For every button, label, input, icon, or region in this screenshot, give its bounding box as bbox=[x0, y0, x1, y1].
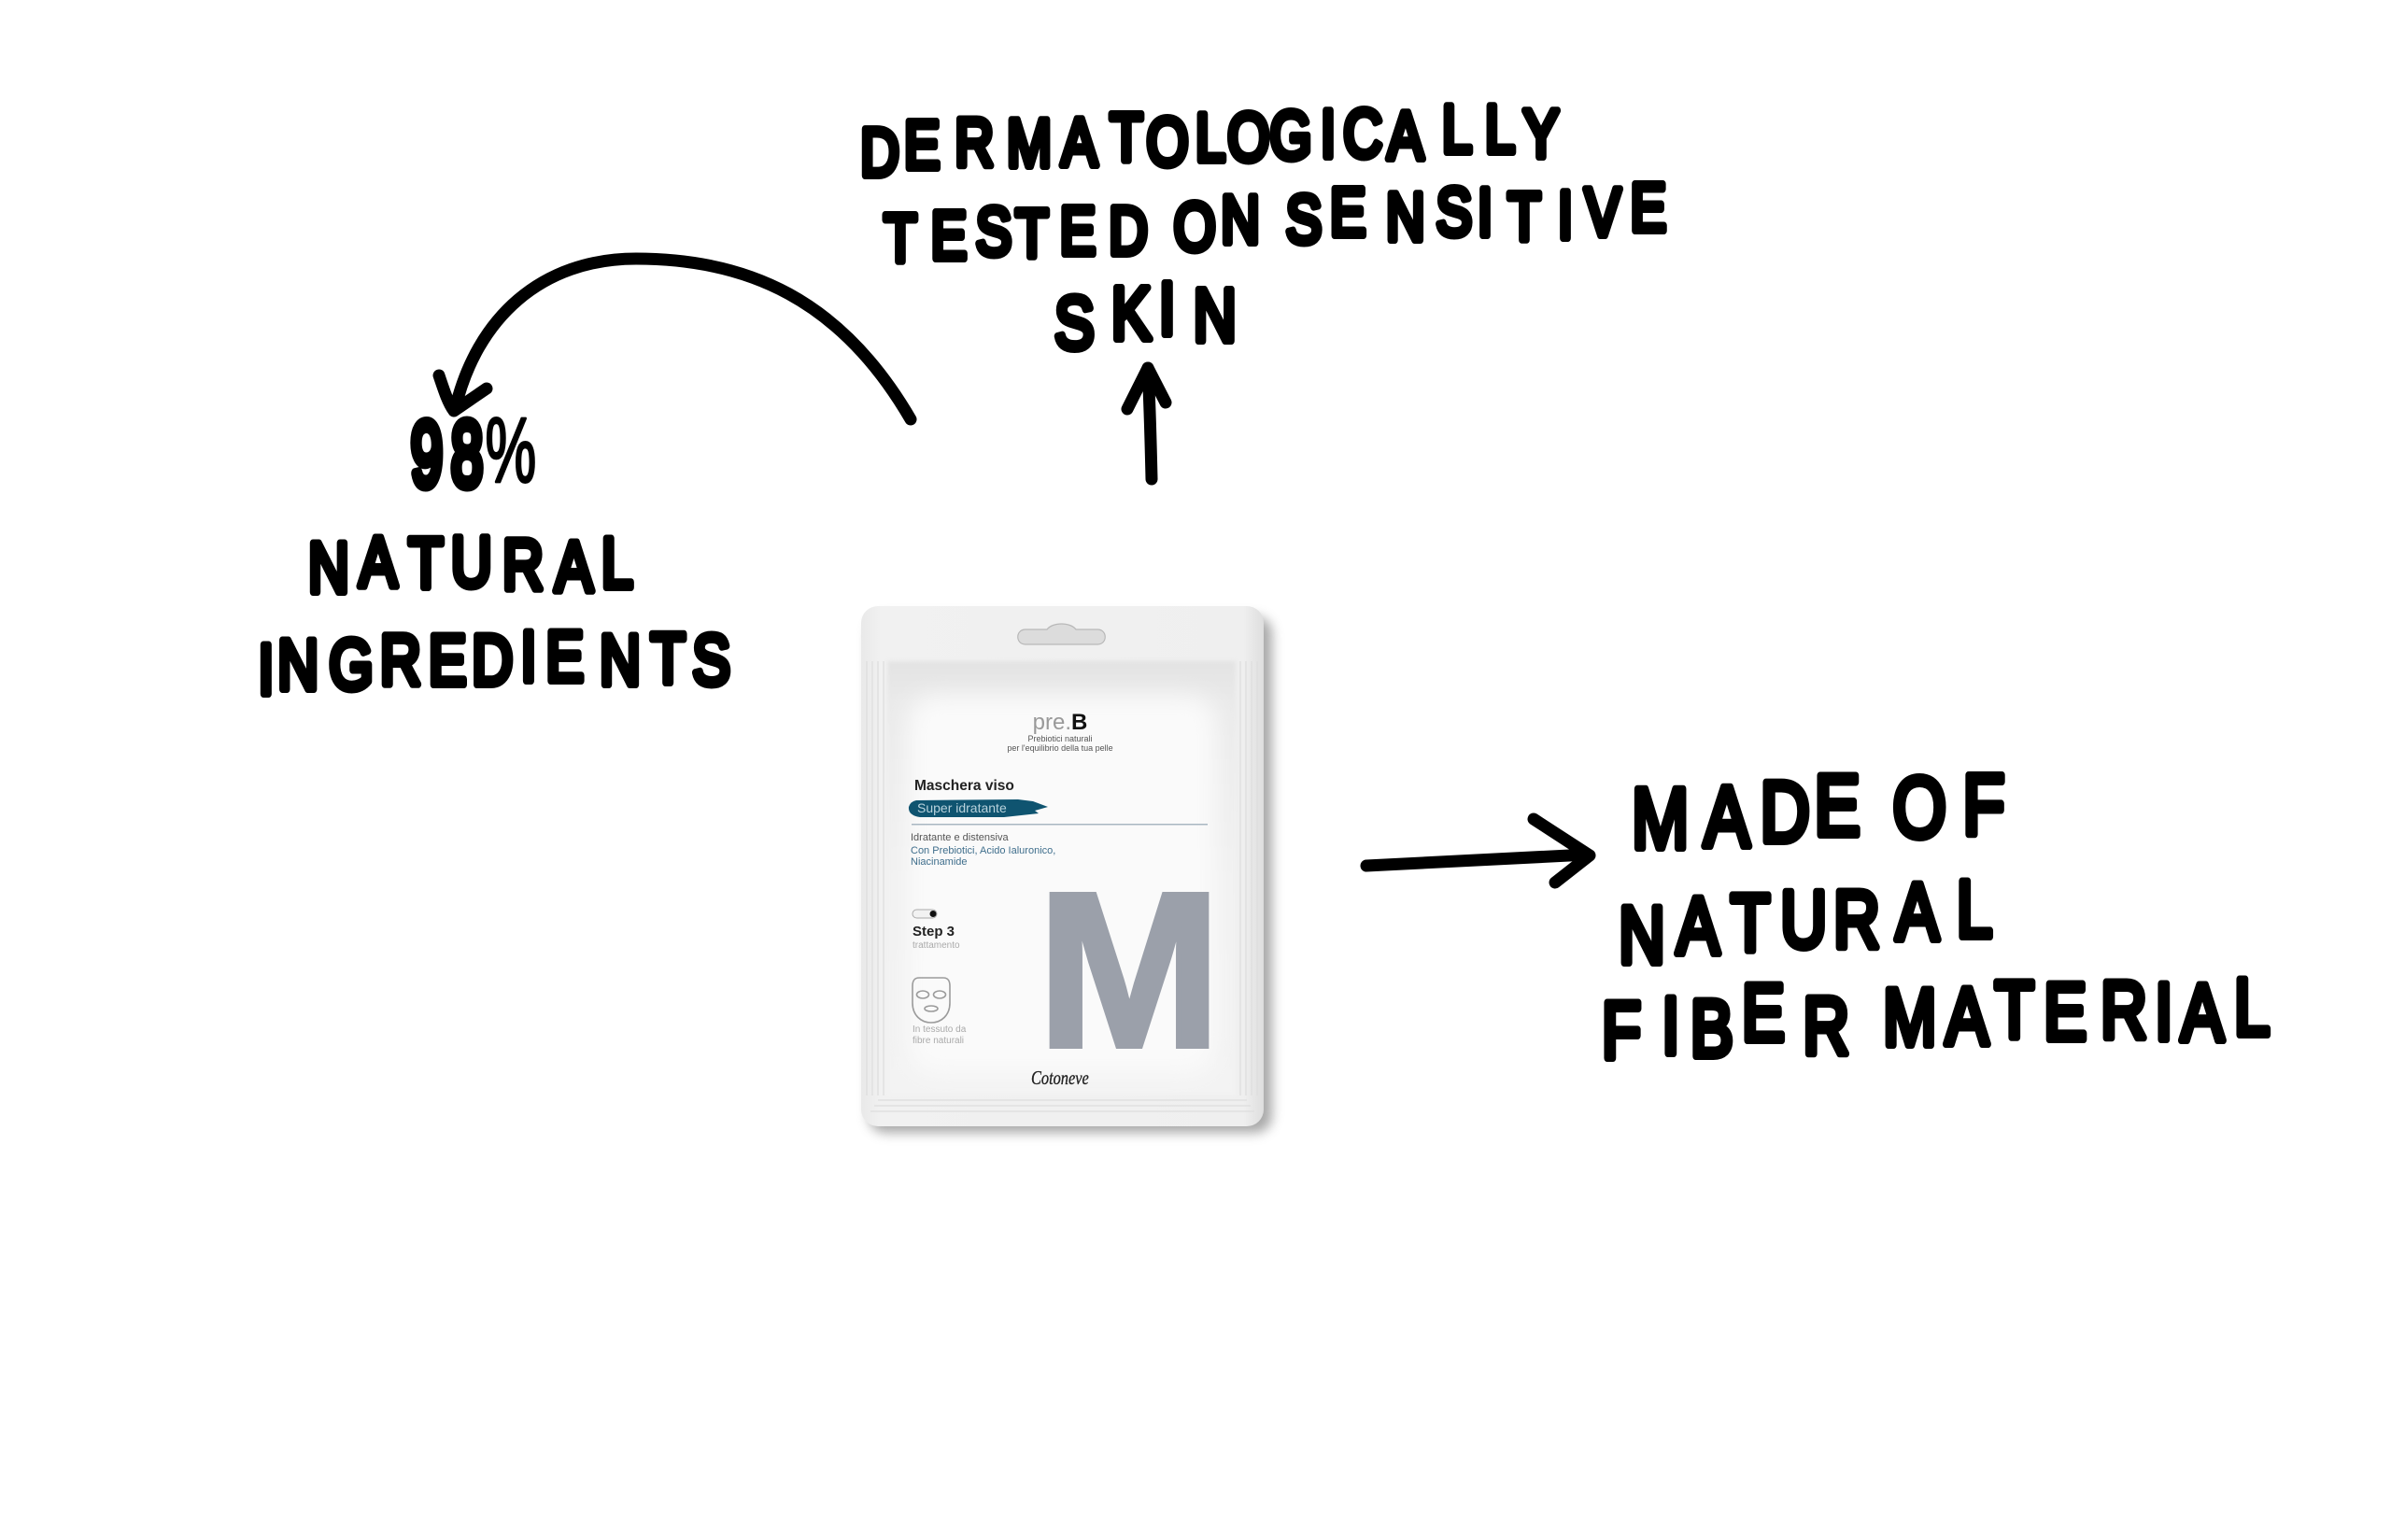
big letter M: M bbox=[1037, 846, 1222, 1095]
text: dermatologically tested on sensitive skin: SKIN bbox=[1054, 267, 1237, 365]
step text bbox=[913, 924, 960, 951]
tagline bbox=[1007, 734, 1113, 753]
step text: Step 3 bbox=[913, 924, 955, 940]
text: made of natural fiber material: NATURAL bbox=[1619, 865, 1992, 981]
mask caption: In tessuto da bbox=[913, 1024, 967, 1035]
mask caption: fibre naturali bbox=[913, 1036, 964, 1046]
description text: Idratante e distensiva bbox=[911, 832, 1009, 843]
text: 98% natural ingredients: NATURAL bbox=[308, 523, 633, 608]
icon: face mask bbox=[913, 978, 950, 1023]
arrow: right to fiber claim bbox=[1366, 819, 1590, 883]
text: 98% natural ingredients: INGREDIENTS bbox=[258, 617, 730, 710]
arrow: curved to 98 percent bbox=[439, 259, 911, 419]
step text: trattamento bbox=[913, 940, 960, 951]
text: 98% natural ingredients: 98% bbox=[411, 400, 536, 506]
logo: Cotoneve: Cotoneve bbox=[1031, 1067, 1089, 1090]
description text: Con Prebiotici, Acido Ialuronico, bbox=[911, 845, 1055, 856]
mask caption bbox=[913, 1024, 967, 1046]
divider bbox=[912, 824, 1208, 826]
text: made of natural fiber material: MADE OF bbox=[1632, 756, 2004, 867]
callout: natural fiber material bbox=[1366, 756, 2270, 1076]
hang hole bbox=[1018, 624, 1105, 644]
brand: pre.B: pre.B bbox=[1033, 710, 1087, 735]
text: 98% natural ingredients bbox=[258, 400, 730, 710]
callout: natural ingredients bbox=[258, 259, 911, 710]
step toggle icon bbox=[913, 910, 937, 918]
label: Super idratante brush stroke bbox=[909, 799, 1048, 817]
text: made of natural fiber material: FIBER MATERIAL bbox=[1602, 963, 2270, 1076]
description text bbox=[911, 832, 1055, 868]
arrow: up to skin claim bbox=[1127, 368, 1166, 479]
text: dermatologically tested on sensitive skin: TESTED ON SENSITIVE bbox=[884, 170, 1666, 276]
text: dermatologically tested on sensitive skin: DERMATOLOGICALLY bbox=[860, 92, 1559, 190]
tagline: per l'equilibrio della tua pelle bbox=[1007, 743, 1113, 753]
description text: Niacinamide bbox=[911, 856, 968, 868]
callout: dermatologically tested bbox=[860, 92, 1666, 479]
pouch inner panel bbox=[867, 661, 1257, 1111]
product: sheet mask pouch bbox=[861, 606, 1272, 1133]
tagline: Prebiotici naturali bbox=[1027, 734, 1093, 743]
text: dermatologically tested on sensitive skin bbox=[860, 92, 1666, 365]
heading: Maschera viso: Maschera viso bbox=[914, 778, 1014, 794]
text: made of natural fiber material bbox=[1602, 756, 2270, 1076]
label: Super idratante brush stroke: Super idratante bbox=[917, 800, 1007, 815]
